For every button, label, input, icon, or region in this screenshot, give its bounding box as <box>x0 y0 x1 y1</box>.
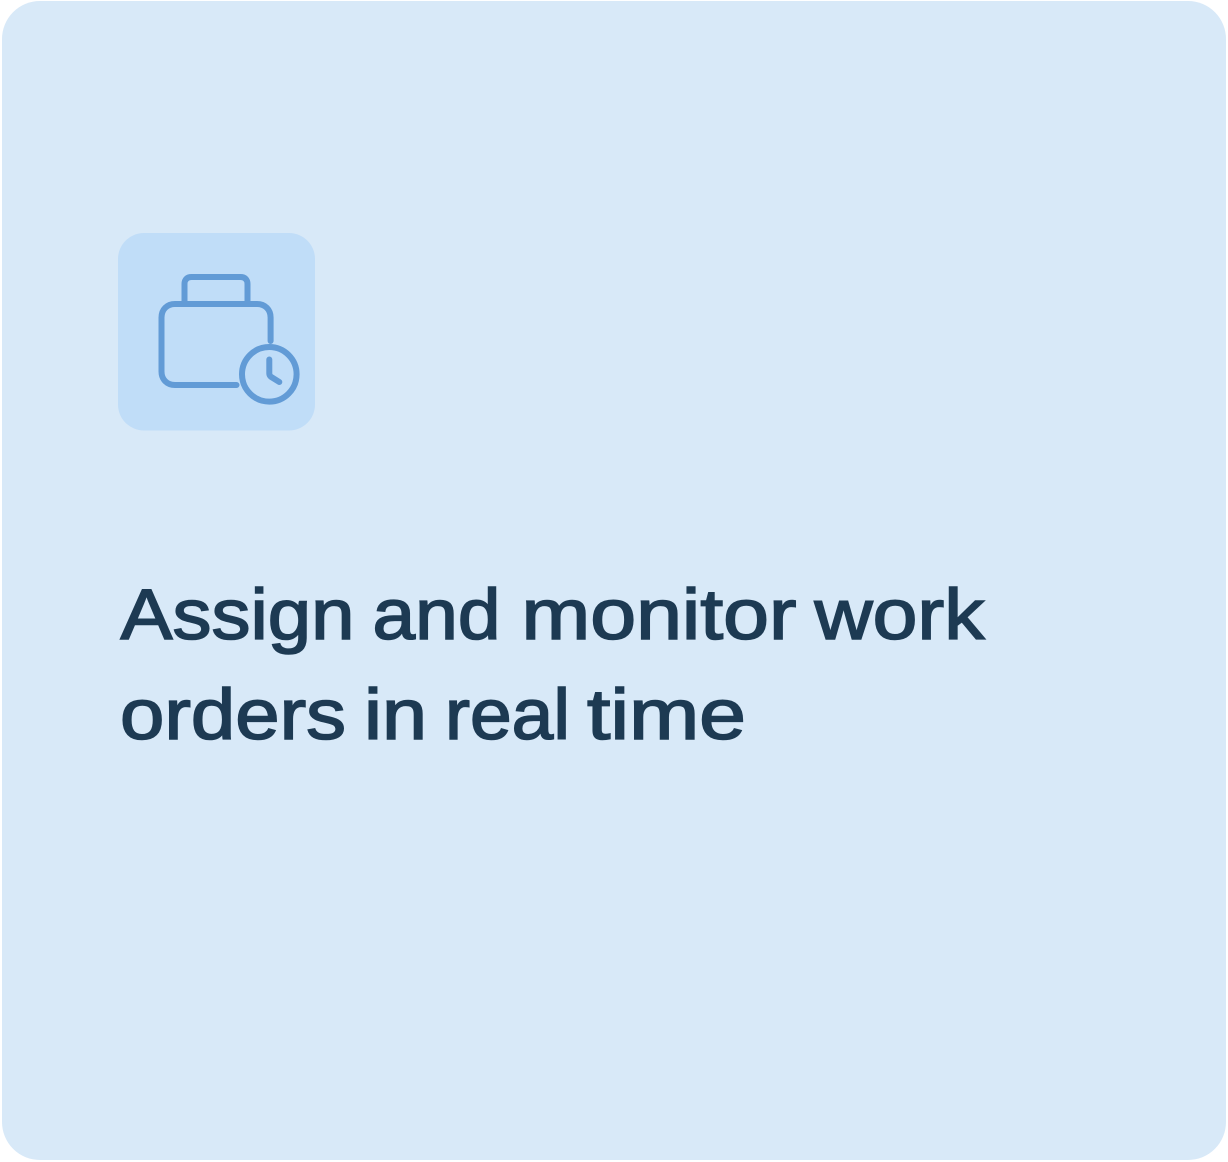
heading line 2: real <box>445 676 570 755</box>
icon tile <box>118 233 315 430</box>
heading line 2 <box>120 676 746 755</box>
heading <box>120 576 985 755</box>
icon: briefcase with clock <box>118 233 315 430</box>
heading line 2: orders <box>120 676 346 755</box>
clock hands <box>269 360 279 382</box>
clock face <box>242 347 297 402</box>
heading line 1: monitor <box>522 576 796 655</box>
heading line 1: Assign <box>120 576 354 655</box>
heading line 1: work <box>813 576 985 655</box>
heading line 1: and <box>372 576 500 655</box>
heading line 2: in <box>364 676 427 755</box>
briefcase body <box>162 304 271 385</box>
heading line 2: time <box>587 676 746 755</box>
briefcase handle <box>184 277 248 304</box>
heading line 1 <box>120 576 985 655</box>
